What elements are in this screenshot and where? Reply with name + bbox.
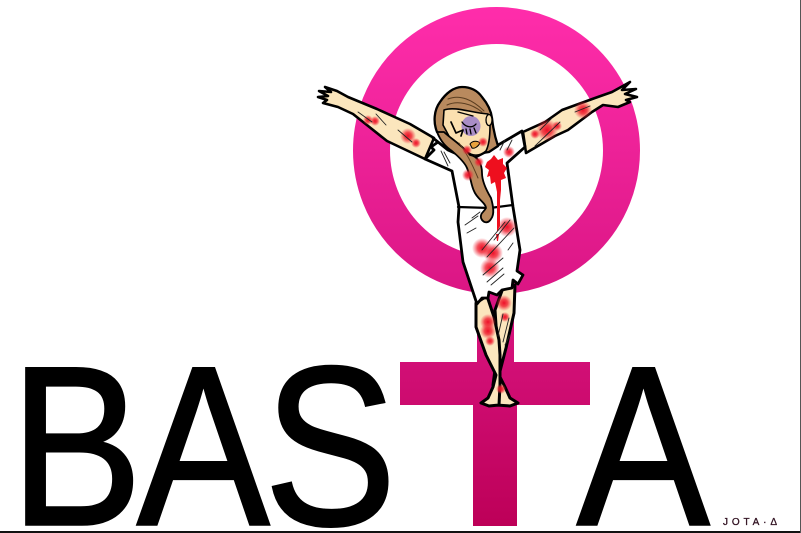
nose xyxy=(451,122,463,136)
right border line xyxy=(800,0,801,533)
wound spots xyxy=(363,101,592,394)
bottom border line xyxy=(0,531,801,533)
waist line xyxy=(458,205,513,208)
closed eye xyxy=(458,112,476,134)
hair xyxy=(435,87,498,155)
face xyxy=(443,109,490,155)
blood on chest xyxy=(485,155,507,232)
hair tress xyxy=(437,132,493,222)
arm right xyxy=(523,82,637,153)
mouth xyxy=(470,141,480,148)
hair strands xyxy=(447,97,484,178)
ring xyxy=(372,26,622,276)
arm left xyxy=(318,87,434,159)
dress xyxy=(425,131,525,304)
bruise xyxy=(462,116,480,136)
legs xyxy=(476,285,518,406)
ear xyxy=(486,114,492,126)
stem and crossbar xyxy=(400,288,590,526)
artist signature: JOTA·Δ xyxy=(723,517,777,528)
female symbol forming the letter T xyxy=(372,26,622,526)
scratch lines xyxy=(358,106,590,345)
crucified woman figure xyxy=(318,82,637,406)
left leg xyxy=(476,296,500,406)
right leg xyxy=(493,285,518,406)
word: BASTA xyxy=(10,320,709,533)
blood drip xyxy=(496,234,499,241)
